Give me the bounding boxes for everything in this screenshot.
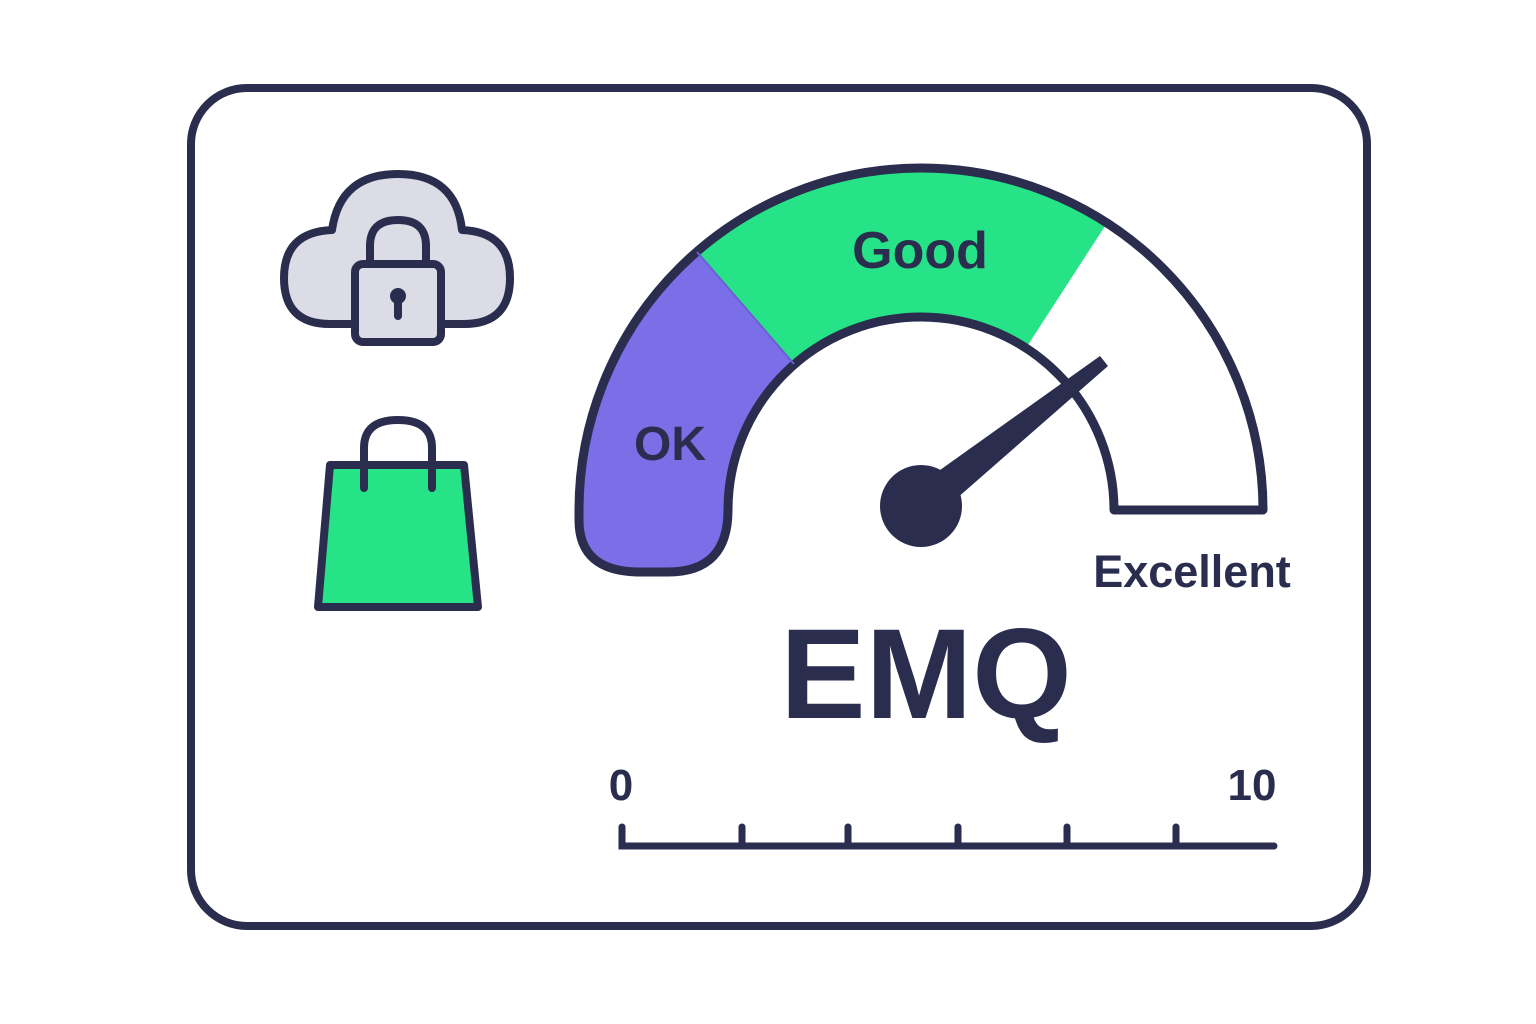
scale labels: 0 (609, 761, 633, 810)
icon: shopping bag (318, 420, 478, 607)
gauge (579, 168, 1263, 572)
title: EMQ: EMQ (780, 603, 1072, 746)
card panel (191, 88, 1367, 926)
gauge segment: good (697, 168, 1107, 364)
scale ruler (622, 827, 1274, 846)
icon: cloud with lock (284, 174, 510, 342)
text: 10 (1228, 761, 1276, 810)
gauge segment: ok (579, 252, 794, 572)
label: OK: OK (634, 418, 706, 471)
label: Good: Good (852, 222, 988, 280)
needle (880, 356, 1108, 547)
label: Excellent: Excellent (1093, 546, 1291, 597)
gauge outline (579, 168, 1263, 572)
gauge segment: white excellent (1026, 223, 1263, 510)
